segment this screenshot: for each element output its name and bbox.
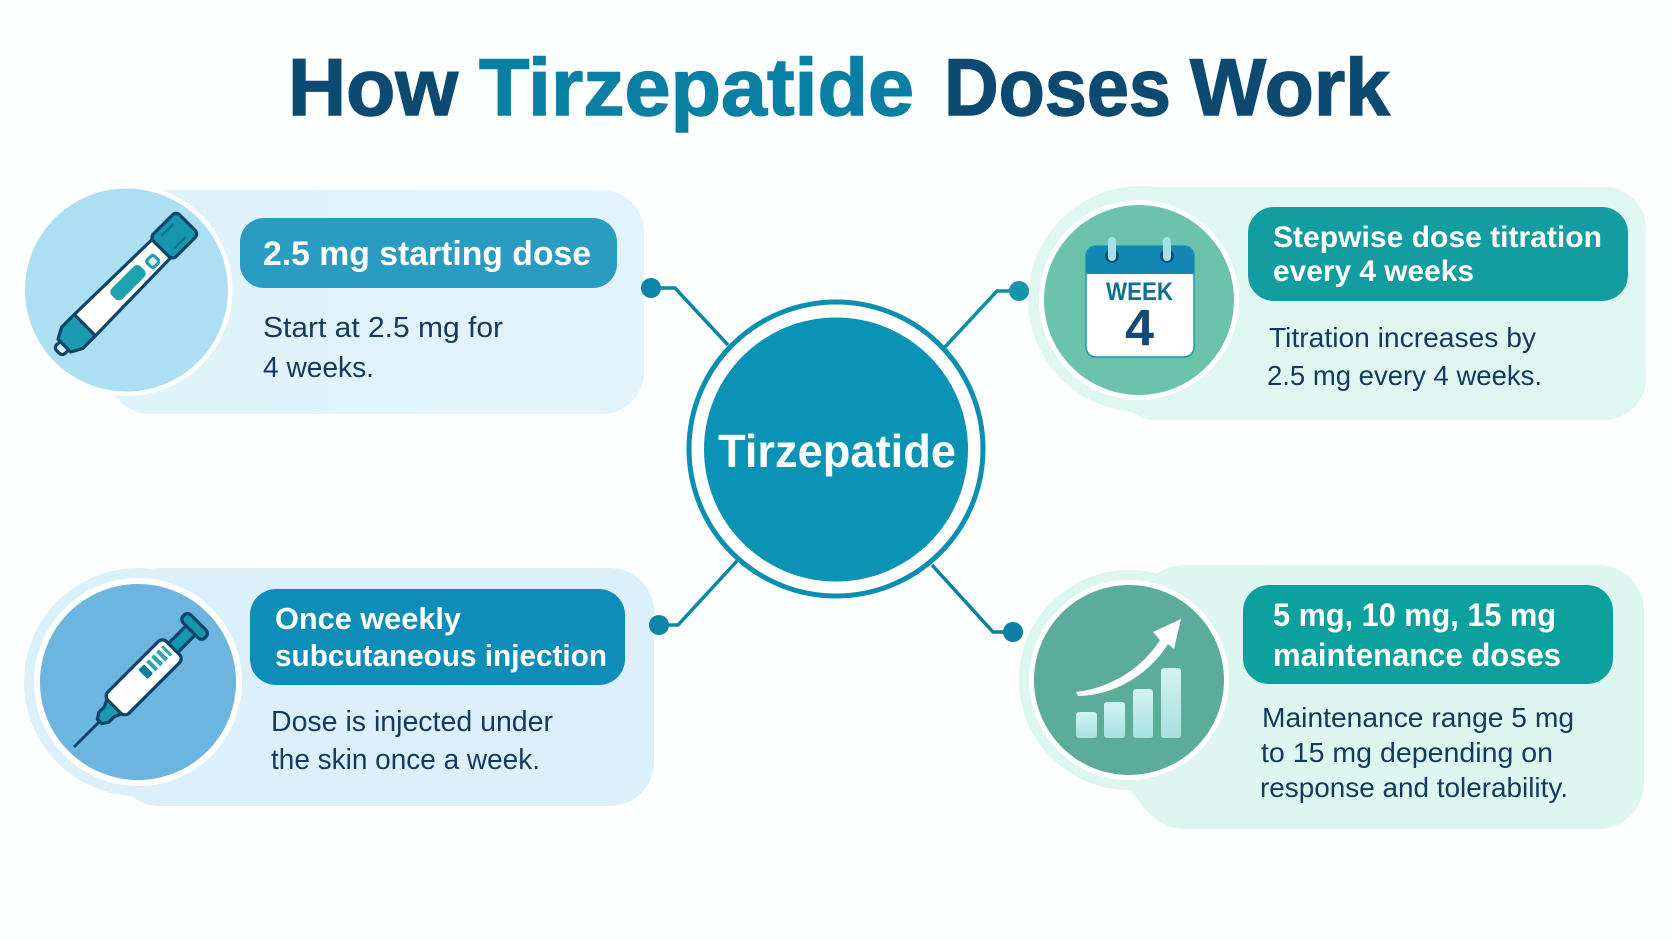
heading pill: Stepwise dose titration (1273, 221, 1602, 254)
central hub (689, 302, 983, 596)
icon: calendar (1086, 237, 1194, 357)
title: Work (1190, 43, 1391, 133)
body text: 4 weeks. (263, 352, 374, 384)
body text: Maintenance range 5 mg (1262, 702, 1574, 733)
connector: top left (641, 278, 728, 345)
panel: stepwise titration (1028, 186, 1646, 420)
panel: starting dose (20, 184, 644, 414)
connector: bottom right (932, 565, 1023, 642)
heading pill: every 4 weeks (1273, 255, 1474, 288)
heading pill: maintenance doses (1273, 637, 1561, 673)
body text: Dose is injected under (271, 706, 553, 738)
heading pill: subcutaneous injection (275, 638, 607, 673)
icon: injection pen (47, 211, 199, 363)
title: Doses (944, 43, 1171, 133)
heading pill: Once weekly (275, 601, 462, 636)
heading pill: 5 mg, 10 mg, 15 mg (1273, 597, 1556, 633)
title: How (288, 43, 459, 133)
connector: top right (945, 281, 1029, 347)
heading pill (250, 589, 625, 685)
central hub: Tirzepatide (718, 425, 956, 477)
icon: calendar: WEEK (1106, 278, 1173, 306)
body text (263, 312, 503, 384)
body text: the skin once a week. (271, 744, 540, 776)
heading pill (1248, 207, 1628, 301)
body text (271, 706, 553, 776)
body text (1267, 322, 1542, 391)
body text: 2.5 mg every 4 weeks. (1267, 360, 1542, 391)
body text: to 15 mg depending on (1261, 737, 1553, 768)
panel: once weekly injection (24, 568, 654, 806)
title: Tirzepatide (479, 43, 914, 133)
panel: maintenance doses (1019, 565, 1644, 829)
icon: syringe (63, 612, 209, 758)
body text: response and tolerability. (1260, 772, 1568, 803)
title (288, 43, 1391, 133)
heading pill: 2.5 mg starting dose (263, 235, 591, 273)
icon: calendar: 4 (1125, 299, 1155, 356)
body text (1260, 702, 1574, 803)
icon: rising bar chart (1076, 619, 1181, 738)
heading pill (1243, 585, 1613, 684)
heading pill (240, 218, 617, 288)
body text: Titration increases by (1269, 322, 1536, 353)
connector: bottom left (649, 561, 737, 635)
body text: Start at 2.5 mg for (263, 312, 503, 344)
